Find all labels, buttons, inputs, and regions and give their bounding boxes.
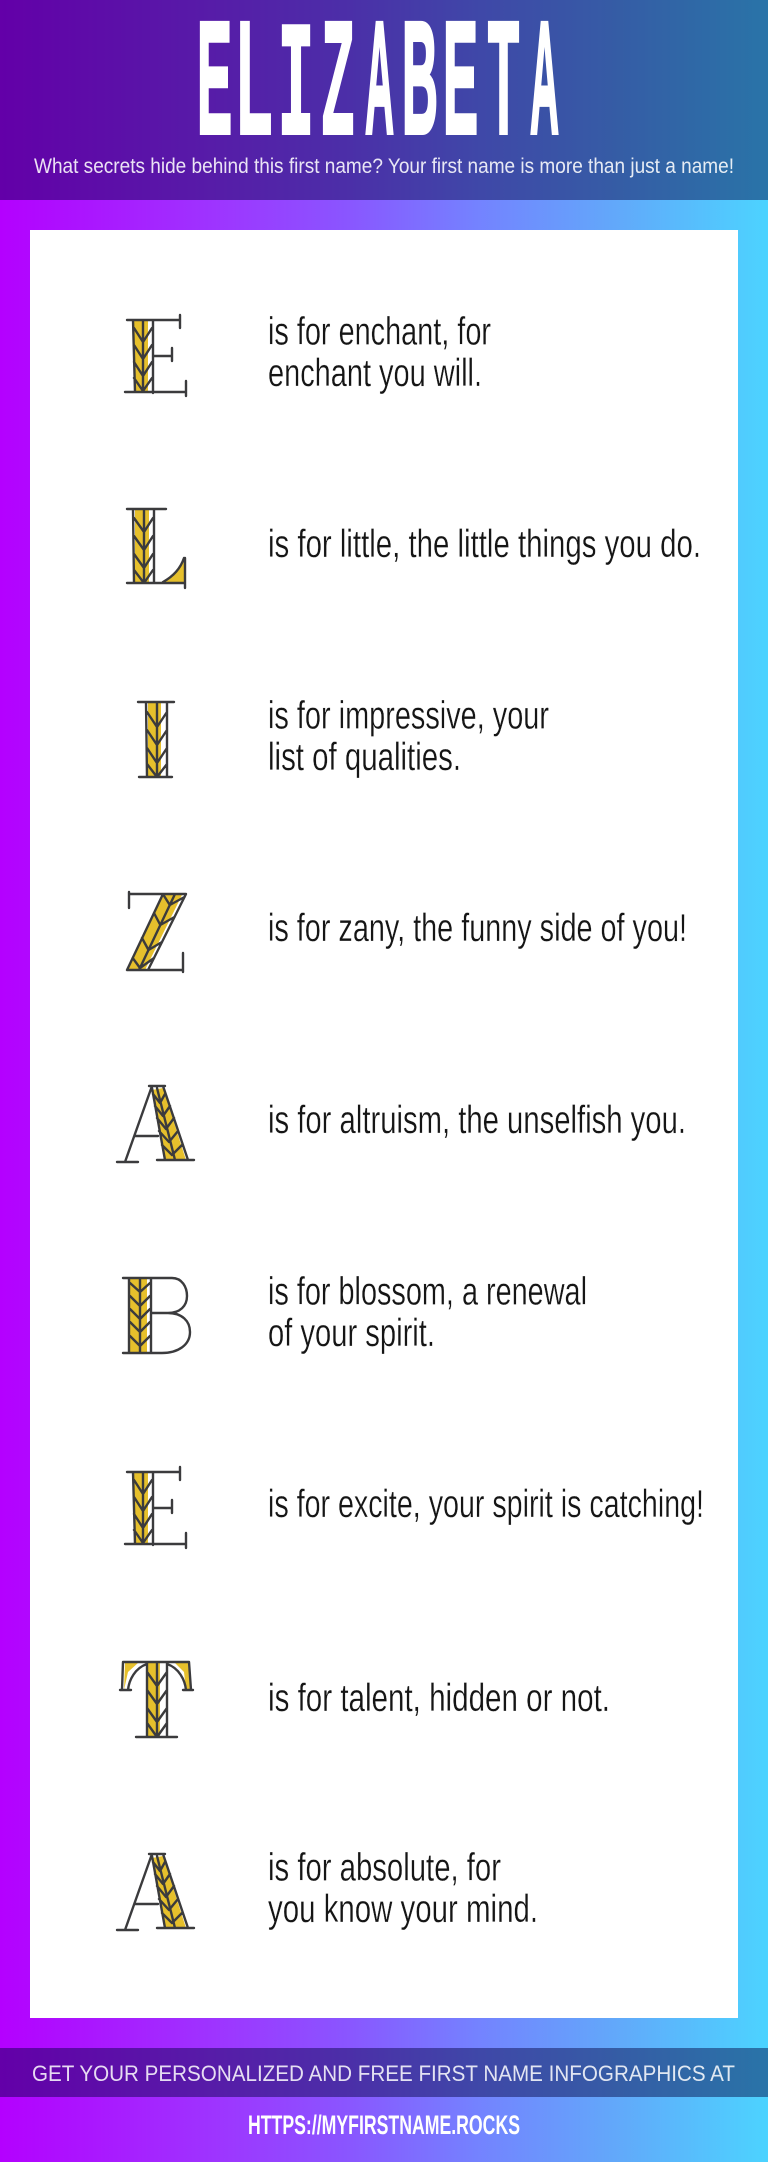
text: impressive: is for impressive, your [268,694,549,738]
icon: letter E [125,315,186,396]
icon: letter E [125,1467,186,1548]
header band [0,0,768,200]
text: impressive: list of qualities. [268,736,461,779]
item: E enchant [125,310,491,396]
icon: letter A [117,1854,194,1930]
icon: letter T [120,1662,193,1737]
icon: letter A [117,1086,194,1162]
item: Z zany [127,892,687,972]
text: absolute: is for absolute, for [268,1846,501,1890]
item: I impressive [138,694,549,779]
title: I [278,0,314,182]
icon: letter I [138,702,174,777]
panel: white letters panel [30,230,738,2018]
item: L little [127,509,701,588]
text: blossom: of your spirit. [268,1312,435,1355]
item: B blossom [123,1270,587,1355]
item: E excite [125,1467,704,1548]
text: absolute: you know your mind. [268,1888,538,1931]
item: T talent [120,1662,610,1737]
text: talent: is for talent, hidden or not. [268,1677,610,1720]
footer url: HTTPS://MYFIRSTNAME.ROCKS [248,2110,520,2140]
icon: letter B [123,1278,190,1353]
icon: letter L [127,509,185,588]
footer band [0,2048,768,2097]
text: blossom: is for blossom, a renewal [268,1270,587,1314]
text: enchant: enchant you will. [268,352,482,395]
icon: letter Z [127,892,186,972]
text: enchant: is for enchant, for [268,310,491,354]
item: A absolute [117,1846,538,1931]
item: A altruism [117,1086,686,1162]
footer call to action: GET YOUR PERSONALIZED AND FREE FIRST NAME INFOGRAPHICS AT [32,2061,735,2086]
